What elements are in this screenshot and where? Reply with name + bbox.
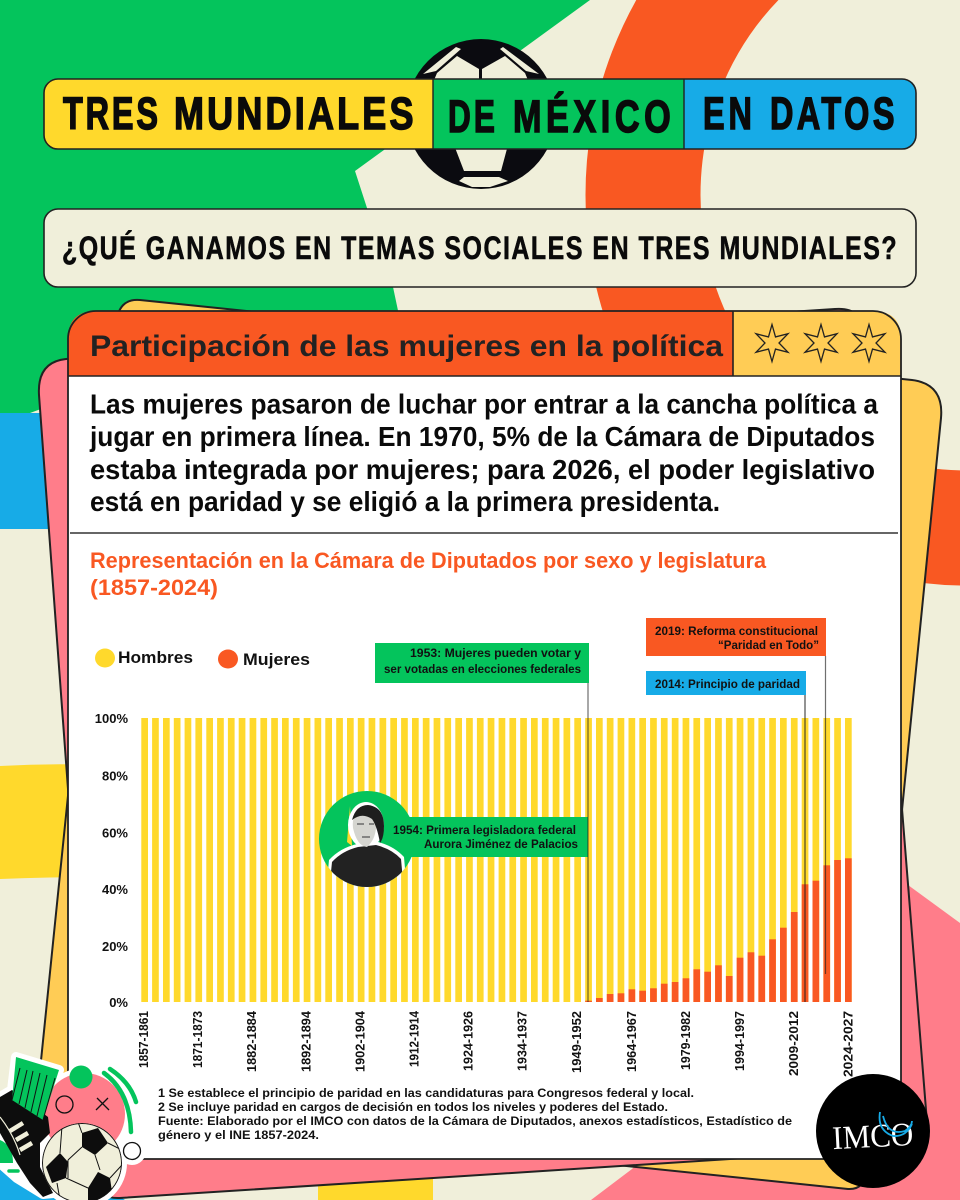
soccer ball behind title <box>406 39 556 189</box>
chart title: Representación en la Cámara de Diputados por sexo y legislatura <box>90 548 767 573</box>
x axis labels: 1912-1914 <box>406 1010 422 1067</box>
callout: 1954 first federal legislator <box>319 791 588 892</box>
x axis labels: 1924-1926 <box>460 1011 476 1071</box>
title: en datos: DATOS <box>770 90 898 139</box>
y axis labels: 20% <box>102 939 128 954</box>
legend: Hombres <box>118 649 193 667</box>
boot stripes <box>10 1123 32 1150</box>
bar chart <box>141 718 852 1002</box>
card header: Participación de las mujeres en la política <box>90 330 723 363</box>
panel: main card <box>68 311 901 1159</box>
title bar <box>44 79 916 149</box>
chart title <box>90 548 767 600</box>
callout: 1954 first federal legislator: 1954: Primera legisladora federal <box>393 825 576 837</box>
x axis labels: 1882-1884 <box>244 1010 259 1072</box>
x axis labels: 1892-1894 <box>298 1010 314 1072</box>
x axis labels: 1902-1904 <box>352 1010 368 1072</box>
callout: 1953 women vote <box>375 643 589 1002</box>
x axis labels: 1979-1982 <box>678 1011 693 1070</box>
subtitle bar <box>44 209 916 287</box>
intro text: estaba integrada por mujeres; para 2026, el poder legislativo <box>90 454 875 485</box>
intro text <box>89 388 878 517</box>
title: de méxico <box>448 91 675 142</box>
chart title: (1857-2024) <box>90 575 218 600</box>
callout: 2014 parity principle <box>646 671 806 1002</box>
footnotes: 2 Se incluye paridad en cargos de decisión en todos los niveles y poderes del Estado. <box>158 1100 668 1114</box>
icon: football sticker <box>0 1057 141 1200</box>
legend <box>95 648 310 669</box>
IMCO logo <box>816 1074 930 1188</box>
y axis labels: 40% <box>102 882 128 897</box>
footnotes: 1 Se establece el principio de paridad en las candidaturas para Congresos federal y local. <box>158 1086 694 1100</box>
title: en datos: EN <box>703 90 756 139</box>
y axis labels <box>95 711 128 1010</box>
sock <box>12 1057 59 1120</box>
boot <box>0 1090 53 1197</box>
title: en datos <box>703 90 898 139</box>
callout: 2019 parity reform <box>646 618 826 974</box>
title: tres mundiales: TRES <box>63 90 161 139</box>
x axis labels: 1857-1861 <box>136 1011 151 1068</box>
y axis labels: 60% <box>102 826 128 840</box>
icon: three stars <box>756 324 885 362</box>
callout: 1953 women vote: 1953: Mujeres pueden votar y <box>410 648 582 660</box>
x axis labels <box>136 1010 856 1077</box>
sticker white outline <box>0 1057 141 1200</box>
x axis labels: 1964-1967 <box>624 1011 639 1072</box>
x axis labels: 1949-1952 <box>569 1011 584 1073</box>
callout: 2019 parity reform: “Paridad en Todo” <box>718 640 819 652</box>
y axis labels: 100% <box>95 711 128 726</box>
intro text: Las mujeres pasaron de luchar por entrar a la cancha política a <box>90 388 878 420</box>
pink circle <box>43 1073 125 1155</box>
portrait: Aurora Jiménez de Palacios <box>328 802 405 887</box>
x axis labels: 2009-2012 <box>786 1011 801 1076</box>
subtitle bar: ¿QUÉ GANAMOS EN TEMAS SOCIALES EN TRES MUNDIALES? <box>62 229 897 267</box>
IMCO logo: IMCO <box>831 1117 914 1157</box>
x axis labels: 2024-2027 <box>840 1011 856 1077</box>
x axis labels: 1994-1997 <box>732 1011 747 1071</box>
card: pink back <box>39 309 928 1198</box>
bars: mujeres <box>585 858 852 1002</box>
intro text: jugar en primera línea. En 1970, 5% de la Cámara de Diputados <box>89 421 875 452</box>
footnotes: Fuente: Elaborado por el IMCO con datos de la Cámara de Diputados, anexos estadísticos, Estadístico de <box>158 1114 792 1128</box>
callout: 1954 first federal legislator: Aurora Jiménez de Palacios <box>424 839 578 851</box>
bars: hombres <box>141 718 852 1002</box>
y axis labels: 80% <box>102 768 128 784</box>
footnotes <box>158 1086 792 1142</box>
callout: 2019 parity reform: 2019: Reforma constitucional <box>655 626 818 638</box>
green blob and marks <box>0 1140 13 1163</box>
footnotes: género y el INE 1857-2024. <box>158 1128 319 1142</box>
x axis labels: 1871-1873 <box>190 1011 205 1068</box>
card header <box>68 311 901 376</box>
x axis labels: 1934-1937 <box>514 1011 530 1071</box>
legend: Mujeres <box>243 651 310 669</box>
callout: 1953 women vote: ser votadas en elecciones federales <box>384 664 581 676</box>
ball <box>42 1122 122 1200</box>
title: tres mundiales <box>63 88 417 139</box>
title: de méxico: MÉXICO <box>513 91 675 142</box>
y axis labels: 0% <box>109 995 128 1010</box>
green arcs <box>104 1069 136 1132</box>
card: yellow back <box>38 300 941 1189</box>
title: de méxico: DE <box>448 93 498 142</box>
intro text: está en paridad y se eligió a la primera presidenta. <box>90 486 720 517</box>
title: tres mundiales: MUNDIALES <box>174 88 417 139</box>
callout: 2014 parity principle: 2014: Principio de paridad <box>655 679 800 691</box>
